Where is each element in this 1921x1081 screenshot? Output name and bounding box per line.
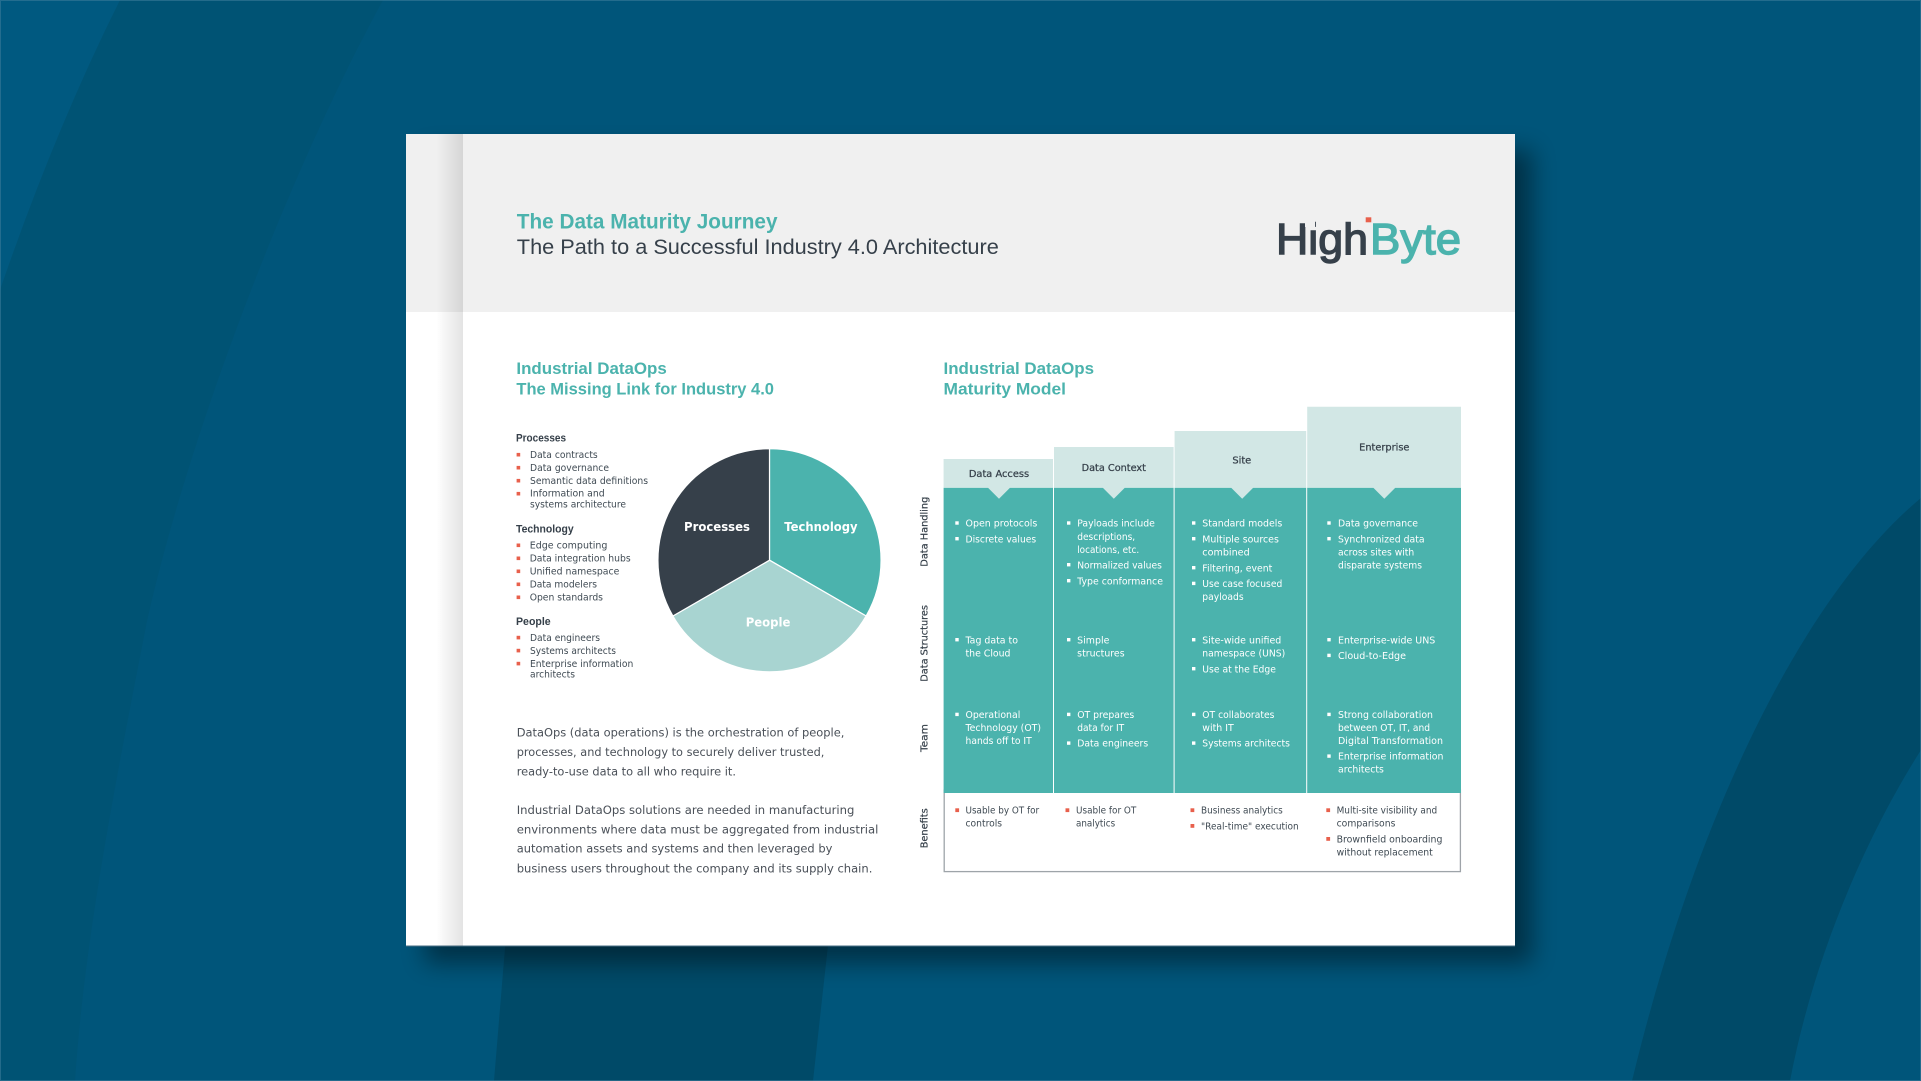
- header labels: [969, 442, 1409, 480]
- column: site: Multiple sources: [1202, 534, 1279, 545]
- left heading: The Missing Link for Industry 4.0: [516, 380, 774, 398]
- benefits row: Multi-site visibility and: [1337, 806, 1437, 817]
- pie chart: Technology: [784, 519, 858, 534]
- teal body: [944, 488, 1461, 793]
- column: data context: Data engineers: [1077, 739, 1148, 750]
- column: enterprise: architects: [1338, 765, 1384, 776]
- column: data context: Normalized values: [1077, 560, 1162, 571]
- list: processes, technology, people: Data modelers: [530, 580, 597, 591]
- list: processes, technology, people: Enterprise information: [530, 659, 633, 670]
- column dividers: [1053, 406, 1307, 793]
- column: data access: Discrete values: [966, 534, 1036, 545]
- list: processes, technology, people: Processes: [516, 433, 566, 445]
- column: site: OT collaborates: [1202, 710, 1275, 721]
- header labels: Data Access: [969, 469, 1029, 480]
- list: processes, technology, people: Information and: [530, 489, 605, 500]
- logo: HighByte: High: [1276, 215, 1368, 264]
- list: processes, technology, people: Unified namespace: [530, 567, 619, 578]
- list: processes, technology, people: Data integration hubs: [530, 554, 631, 565]
- header labels: Enterprise: [1359, 442, 1409, 453]
- column: data context: structures: [1077, 648, 1125, 659]
- column: enterprise: Synchronized data: [1338, 534, 1425, 545]
- benefits row: [955, 806, 1442, 858]
- list: processes, technology, people: systems architecture: [530, 499, 626, 510]
- header band: [406, 134, 1515, 946]
- column: site: Filtering, event: [1202, 563, 1273, 574]
- column: site: Standard models: [1202, 519, 1282, 530]
- column: site: combined: [1202, 547, 1250, 558]
- left heading: Industrial DataOps: [516, 359, 667, 378]
- right heading: Industrial DataOps: [944, 359, 1094, 378]
- column: enterprise: Data governance: [1338, 519, 1418, 530]
- benefits row: without replacement: [1337, 847, 1433, 858]
- list: processes, technology, people: Technology: [516, 523, 575, 535]
- column headers: [944, 407, 1461, 499]
- title: The Data Maturity Journey: [517, 211, 778, 234]
- benefits row: Usable by OT for: [966, 806, 1039, 817]
- title: The Path to a Successful Industry 4.0 Architecture: [517, 236, 999, 259]
- row labels: [920, 497, 930, 848]
- body paragraphs: automation assets and systems and then leveraged by: [517, 842, 832, 856]
- list: processes, technology, people: Systems architects: [530, 646, 616, 657]
- column: enterprise: Enterprise information: [1338, 752, 1444, 763]
- column: enterprise: disparate systems: [1338, 560, 1422, 571]
- column: site: namespace (UNS): [1202, 648, 1285, 659]
- body paragraphs: [517, 726, 878, 875]
- body paragraphs: business users throughout the company and its supply chain.: [517, 861, 872, 875]
- maturity model table: [920, 406, 1461, 872]
- column: site: with IT: [1202, 723, 1234, 734]
- benefits row: controls: [966, 819, 1002, 830]
- column: enterprise: Cloud-to-Edge: [1338, 651, 1406, 662]
- column: site: Systems architects: [1202, 739, 1290, 750]
- column: data context: descriptions,: [1077, 532, 1135, 543]
- column: data context: Simple: [1077, 635, 1110, 646]
- logo: HighByte: [1276, 215, 1461, 264]
- column: site: Site-wide unified: [1202, 635, 1281, 646]
- row labels: Team: [920, 724, 930, 753]
- column: data access: Technology (OT): [964, 723, 1041, 734]
- pie chart: People: [746, 615, 790, 630]
- column: data context: locations, etc.: [1077, 545, 1139, 556]
- column: data context: Type conformance: [1076, 576, 1163, 587]
- row labels: Data Handling: [920, 497, 930, 567]
- column: data access: Tag data to: [964, 635, 1018, 646]
- body paragraphs: environments where data must be aggregated from industrial: [517, 822, 878, 836]
- benefits row: "Real-time" execution: [1201, 821, 1299, 832]
- list: processes, technology, people: Data engineers: [530, 633, 600, 644]
- right heading: [944, 359, 1094, 398]
- column: data context: OT prepares: [1077, 710, 1134, 721]
- column: data access: Open protocols: [966, 519, 1037, 530]
- page drop shadow: [425, 150, 1532, 963]
- body paragraphs: ready-to-use data to all who require it.: [517, 764, 736, 778]
- column: site: Use case focused: [1202, 579, 1282, 590]
- column: data context: [1076, 519, 1163, 750]
- row labels: Data Structures: [920, 605, 930, 682]
- header labels: Site: [1232, 456, 1251, 467]
- right heading: Maturity Model: [944, 380, 1066, 398]
- benefits row: Business analytics: [1201, 806, 1283, 817]
- list: processes, technology, people: Semantic data definitions: [530, 476, 648, 487]
- column: enterprise: across sites with: [1338, 547, 1414, 558]
- column: site: payloads: [1202, 592, 1244, 603]
- left heading: [516, 359, 774, 398]
- header labels: Data Context: [1082, 463, 1146, 474]
- list: processes, technology, people: People: [516, 616, 551, 628]
- benefits row: Usable for OT: [1076, 806, 1137, 817]
- body paragraphs: processes, and technology to securely deliver trusted,: [517, 745, 824, 759]
- column: data access: hands off to IT: [966, 736, 1032, 747]
- column: data access: Operational: [966, 710, 1020, 721]
- pie chart: Processes: [684, 519, 750, 534]
- column: data context: data for IT: [1077, 723, 1125, 734]
- list: processes, technology, people: Data governance: [530, 463, 609, 474]
- column: enterprise: Digital Transformation: [1338, 736, 1443, 747]
- list: processes, technology, people: [516, 433, 648, 680]
- column: enterprise: Strong collaboration: [1338, 710, 1433, 721]
- column: data context: Payloads include: [1077, 519, 1155, 530]
- column: enterprise: [1338, 519, 1444, 776]
- body paragraphs: Industrial DataOps solutions are needed in manufacturing: [517, 803, 854, 817]
- document page: [406, 134, 1515, 946]
- list: processes, technology, people: Open standards: [530, 593, 603, 604]
- column: enterprise: Enterprise-wide UNS: [1338, 635, 1435, 646]
- benefits row: comparisons: [1337, 819, 1396, 830]
- column: site: [1202, 519, 1290, 750]
- column: data access: [964, 519, 1041, 747]
- column: site: Use at the Edge: [1202, 664, 1276, 675]
- title: [517, 211, 999, 259]
- pie chart: [658, 449, 881, 672]
- list: processes, technology, people: Edge computing: [530, 541, 607, 552]
- benefits row: Brownfield onboarding: [1337, 834, 1442, 845]
- logo: HighByte: Byte: [1370, 215, 1461, 264]
- benefits box: [944, 790, 1460, 872]
- white bullets: [955, 521, 1331, 758]
- list: processes, technology, people: Data contracts: [530, 450, 598, 461]
- column: data access: the Cloud: [966, 648, 1011, 659]
- benefits row: analytics: [1076, 819, 1115, 830]
- row labels: Benefits: [920, 808, 930, 848]
- list: processes, technology, people: architects: [530, 669, 575, 680]
- column: enterprise: between OT, IT, and: [1338, 723, 1430, 734]
- body paragraphs: DataOps (data operations) is the orchestration of people,: [517, 726, 844, 740]
